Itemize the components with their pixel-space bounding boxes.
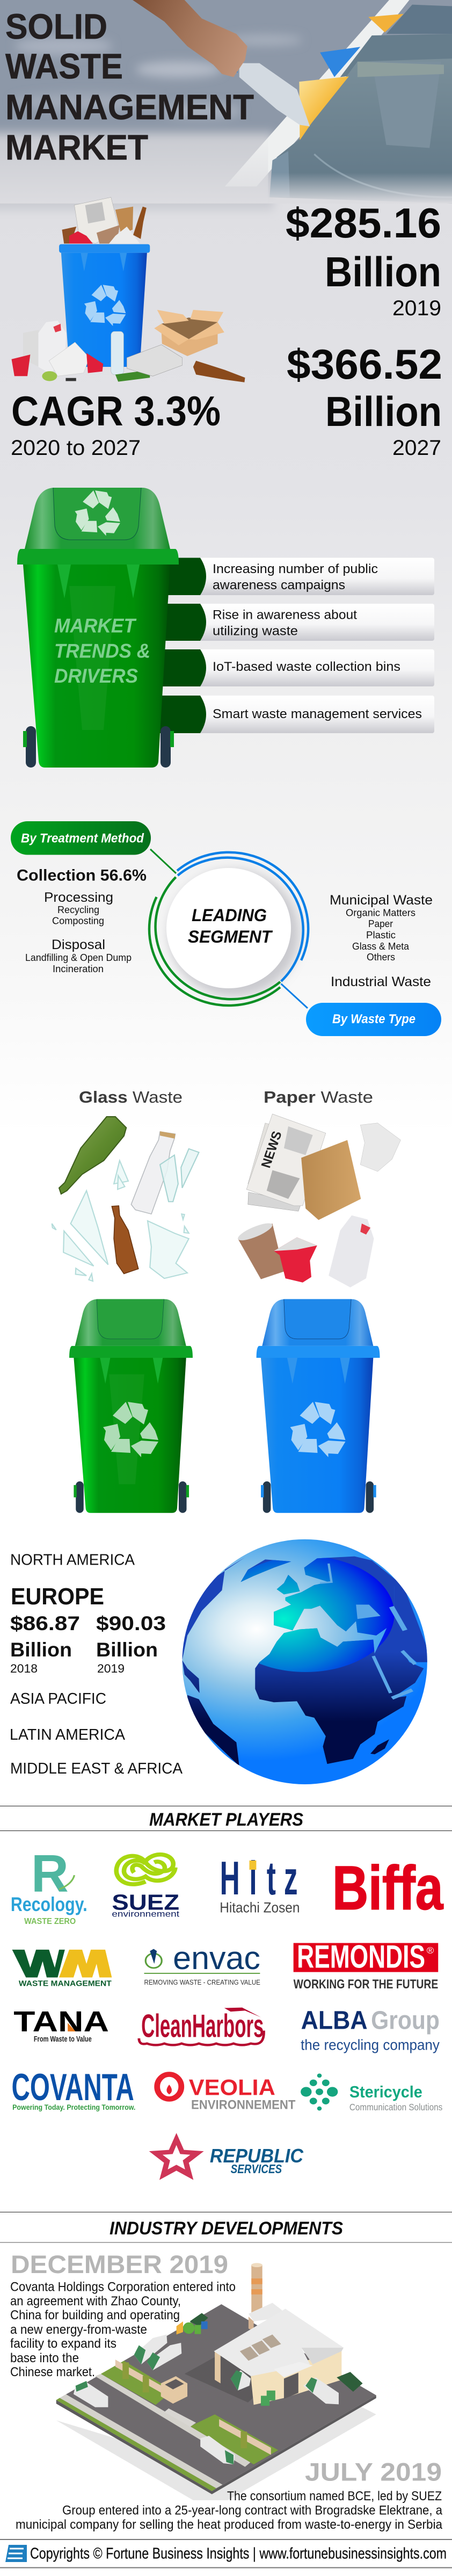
- illustration: blue recycling bin with waste: [11, 197, 245, 382]
- illustration: isometric waste plant: [56, 2263, 376, 2500]
- logo: Covanta: Powering Today. Protecting Tomorrow.: [12, 2104, 135, 2112]
- logo: Republic Services: [149, 2133, 304, 2180]
- region: middle east and africa: MIDDLE EAST & AFRICA: [10, 1760, 183, 1777]
- pill: by treatment method: [11, 821, 151, 855]
- center label: LEADING: [192, 906, 267, 925]
- pill: by treatment method: By Treatment Method: [21, 831, 144, 846]
- development: December 2019: DECEMBER 2019: [11, 2250, 228, 2278]
- panel: company logos: [11, 1844, 443, 2180]
- logo: Hitz Hitachi Zosen: Hitachi Zosen: [220, 1900, 300, 1916]
- logo: Veolia: VEOLIA: [189, 2075, 275, 2100]
- logo: Covanta: [11, 2066, 135, 2112]
- bin label: DRIVERS: [54, 665, 138, 687]
- region: europe with values: Billion: [10, 1639, 72, 1661]
- market value 2027: 2027: [392, 436, 441, 460]
- market value 2019: $285.16: [286, 199, 441, 247]
- logo: Alba Group: ALBA: [301, 2006, 368, 2035]
- logo: Envac: [144, 1940, 260, 1986]
- logo: Hitz Hitachi Zosen: Hitz: [220, 1853, 298, 1905]
- region: europe with values: Billion: [96, 1639, 158, 1661]
- treatment method list: Incineration: [53, 964, 104, 974]
- development: December 2019: base into the: [10, 2351, 79, 2365]
- region: north america: NORTH AMERICA: [10, 1552, 135, 1569]
- logo: Clean Harbors: CleanHarbors: [141, 2008, 264, 2044]
- title: [5, 6, 254, 167]
- treatment method list: Composting: [52, 916, 104, 927]
- panel: market trends and drivers: [17, 488, 434, 768]
- heading: paper waste: Paper Waste: [264, 1088, 373, 1106]
- globe: [182, 1539, 427, 1784]
- treatment method list: Recycling: [57, 905, 99, 915]
- logo: Suez: environnement: [112, 1910, 180, 1919]
- development: July 2019: [16, 2457, 443, 2532]
- treatment method list: [17, 867, 147, 974]
- blue rings: [177, 852, 308, 981]
- blue bin: [257, 1299, 380, 1513]
- logo: Remondis: ®: [427, 1945, 434, 1956]
- development: December 2019: [10, 2250, 236, 2379]
- logo: Recology: WASTE ZERO: [24, 1917, 76, 1926]
- logo: Republic Services: SERVICES: [231, 2162, 282, 2176]
- heading: glass waste: Glass Waste: [79, 1088, 183, 1106]
- heading: market players: MARKET PLAYERS: [149, 1810, 303, 1830]
- market value 2027: [287, 341, 442, 460]
- driver text: [213, 562, 422, 721]
- logo: Envac: REMOVING WASTE - CREATING VALUE: [144, 1979, 260, 1986]
- glass waste items: [52, 1117, 199, 1281]
- panel: leading segment: [11, 821, 441, 1036]
- green bin: [69, 1299, 193, 1513]
- bin label: TRENDS &: [54, 640, 150, 662]
- logo: Suez: SUEZ: [112, 1891, 179, 1915]
- CAGR stat: CAGR 3.3%: [11, 387, 221, 435]
- title: SOLID: [5, 6, 107, 46]
- driver text: awareness campaigns: [213, 578, 345, 592]
- market value 2019: Billion: [325, 248, 441, 295]
- hero photo: hand dropping a bottle into recycling bins: [0, 0, 452, 209]
- region: asia pacific: ASIA PACIFIC: [10, 1690, 106, 1707]
- waste type list: [330, 893, 433, 989]
- logo: Clean Harbors: [139, 2008, 264, 2045]
- development: December 2019: China for building and operating: [10, 2308, 180, 2322]
- waste type list: Organic Matters: [346, 908, 415, 918]
- icon: Fortune Business Insights logo: [5, 2545, 27, 2562]
- logo: Recology: R: [31, 1844, 69, 1903]
- logo: Covanta: COVANTA: [11, 2066, 134, 2108]
- footer: [5, 2545, 447, 2562]
- development: December 2019: a new energy-from-waste: [10, 2322, 147, 2337]
- treatment method list: Landfilling & Open Dump: [25, 952, 132, 963]
- logo: Stericycle: [301, 2074, 442, 2112]
- logo: Recology: [11, 1844, 88, 1926]
- logo: Recology: Recology.: [11, 1893, 88, 1916]
- development: July 2019: JULY 2019: [305, 2457, 442, 2486]
- logo: Remondis: [294, 1939, 438, 1992]
- development: December 2019: Covanta Holdings Corporation entered into: [10, 2280, 236, 2295]
- waste type list: Municipal Waste: [330, 893, 433, 908]
- heading: industry developments: INDUSTRY DEVELOPMENTS: [110, 2218, 343, 2239]
- waste type list: Paper: [368, 918, 393, 929]
- title: MANAGEMENT: [5, 87, 254, 127]
- region: europe with values: EUROPE: [11, 1583, 104, 1610]
- title: MARKET: [5, 127, 148, 167]
- connector: waste type: [281, 984, 308, 1008]
- driver text: Rise in awareness about: [213, 608, 357, 623]
- logo: Veolia: [157, 2074, 296, 2112]
- driver bars: [150, 558, 434, 733]
- logo: Tana: From Waste to Value: [34, 2035, 92, 2044]
- logo: WM Waste Management: WASTE MANAGEMENT: [19, 1979, 112, 1988]
- market value 2019: 2019: [392, 296, 441, 320]
- logo: Veolia: ENVIRONNEMENT: [191, 2098, 296, 2112]
- market value 2019: [286, 199, 441, 320]
- center label: SEGMENT: [188, 927, 273, 946]
- development: December 2019: facility to expand its: [10, 2336, 116, 2351]
- treatment method list: Collection 56.6%: [17, 867, 147, 885]
- logo: Envac: envac: [173, 1940, 260, 1976]
- center circle: [166, 868, 291, 988]
- waste type list: Industrial Waste: [331, 974, 431, 989]
- ring shadow: [169, 870, 300, 997]
- logo: WM Waste Management: [12, 1950, 112, 1988]
- logo: Stericycle: Stericycle: [349, 2083, 422, 2101]
- region: europe with values: $86.87: [10, 1612, 80, 1634]
- CAGR stat: [11, 387, 221, 460]
- region: latin america: LATIN AMERICA: [10, 1726, 126, 1743]
- panel: regional data: [10, 1539, 427, 1784]
- waste type list: Others: [367, 952, 395, 963]
- green bin: [17, 488, 179, 768]
- market value 2027: Billion: [325, 388, 442, 435]
- CAGR stat: 2020 to 2027: [11, 436, 141, 460]
- treatment method list: Processing: [44, 890, 113, 905]
- waste type list: Glass & Meta: [352, 941, 410, 952]
- region: europe with values: [10, 1583, 166, 1675]
- region: europe with values: 2019: [97, 1662, 125, 1675]
- market value 2027: $366.52: [287, 341, 442, 388]
- driver text: Increasing number of public: [213, 562, 378, 576]
- logo: Alba Group: [301, 2006, 440, 2053]
- logo: Tana: TANA: [13, 2006, 109, 2038]
- driver text: utilizing waste: [213, 624, 298, 638]
- paper waste items: NEWS: [259, 1130, 285, 1170]
- logo: Republic Services: REPUBLIC: [210, 2145, 304, 2167]
- region: europe with values: 2018: [10, 1662, 38, 1675]
- bin label: MARKET: [54, 614, 137, 637]
- pill: by waste type: By Waste Type: [332, 1012, 415, 1026]
- logo: Suez: [112, 1855, 180, 1919]
- panel: paper waste: [236, 1088, 400, 1513]
- pill: by waste type: [306, 1003, 441, 1036]
- development: December 2019: Chinese market.: [10, 2365, 95, 2379]
- driver text: IoT-based waste collection bins: [213, 660, 400, 674]
- development: December 2019: an agreement with Zhao County,: [10, 2294, 181, 2309]
- green rings: [149, 877, 280, 1005]
- treatment method list: Disposal: [52, 937, 105, 952]
- title: WASTE: [5, 46, 123, 86]
- center label: [188, 906, 273, 946]
- connector: treatment method: [150, 849, 176, 873]
- driver text: Smart waste management services: [213, 707, 422, 721]
- paper waste items: [236, 1114, 400, 1287]
- waste type list: Plastic: [366, 930, 396, 940]
- bin label: [54, 614, 150, 687]
- panel: glass waste: [52, 1088, 199, 1513]
- region: europe with values: $90.03: [96, 1612, 166, 1634]
